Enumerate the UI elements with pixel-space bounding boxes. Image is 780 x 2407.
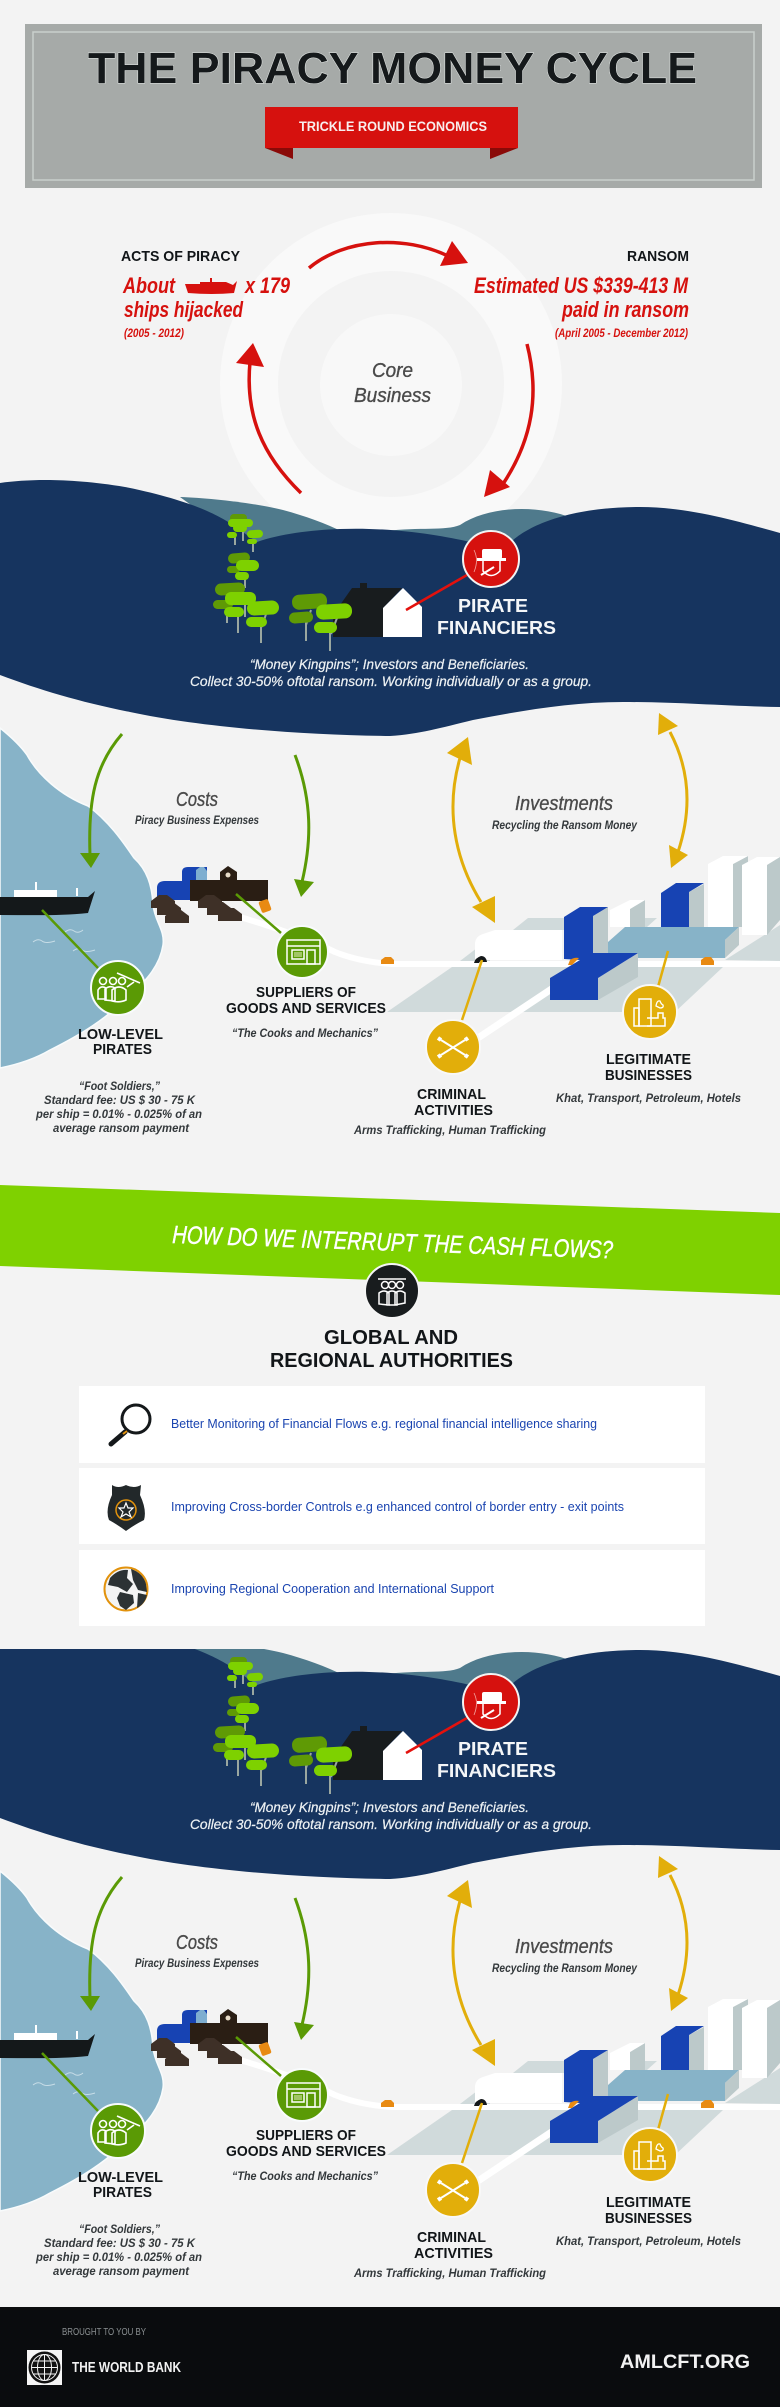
criminal activities text: ACTIVITIES <box>414 1102 493 1119</box>
icon: suppliers <box>276 2069 328 2121</box>
icon: red ship <box>185 278 237 294</box>
criminal activities text: Arms Trafficking, Human Trafficking <box>353 2266 547 2280</box>
investments label <box>492 1936 638 1975</box>
title: THE PIRACY MONEY CYCLE <box>88 44 697 93</box>
icon: legitimate businesses <box>623 2128 677 2182</box>
ransom text: Estimated US $339-413 M <box>474 273 689 298</box>
lake <box>0 728 163 1068</box>
core business cycle circles <box>220 213 562 555</box>
ransom text: RANSOM <box>627 248 689 265</box>
criminal activities text: CRIMINAL <box>417 1086 486 1103</box>
cycle arrows <box>236 241 533 497</box>
criminal activities text: Arms Trafficking, Human Trafficking <box>353 1123 547 1137</box>
icon: low-level pirates <box>91 2104 145 2158</box>
navy hills <box>0 1649 780 1879</box>
footer <box>0 2307 780 2407</box>
ransom text: (April 2005 - December 2012) <box>555 326 688 340</box>
description: “Money Kingpins”; Investors and Beneficiaries. <box>250 1799 529 1815</box>
legitimate businesses text: Khat, Transport, Petroleum, Hotels <box>556 2234 741 2248</box>
heading: pirate financiers <box>437 596 556 638</box>
icon: world bank logo <box>27 2350 62 2385</box>
investments label <box>492 793 638 832</box>
description: Collect 30-50% oftotal ransom. Working individually or as a group. <box>190 673 592 689</box>
costs label: Piracy Business Expenses <box>135 813 259 827</box>
trees <box>213 514 352 651</box>
low-level pirates text <box>35 1026 202 1135</box>
acts of piracy text: About <box>122 273 176 298</box>
description <box>190 656 592 689</box>
suppliers text: “The Cooks and Mechanics” <box>232 2169 378 2183</box>
legitimate businesses text: BUSINESSES <box>605 2210 692 2227</box>
panel: regional cooperation <box>79 1550 705 1626</box>
heading: global and regional authorities: GLOBAL AND <box>324 1327 458 1349</box>
core business cycle circles: Business <box>354 385 431 407</box>
suppliers text: “The Cooks and Mechanics” <box>232 1026 378 1040</box>
low-level pirates text: “Foot Soldiers,” <box>79 1079 160 1093</box>
legitimate businesses text: BUSINESSES <box>605 1067 692 1084</box>
description: “Money Kingpins”; Investors and Beneficiaries. <box>250 656 529 672</box>
icon: legitimate businesses <box>623 985 677 1039</box>
heading: pirate financiers: FINANCIERS <box>437 1761 556 1781</box>
leader lines <box>42 2037 668 2163</box>
ship <box>0 2025 95 2094</box>
low-level pirates text: LOW-LEVEL <box>78 1026 163 1043</box>
icon: magnifier <box>111 1405 150 1444</box>
panel: regional cooperation: Improving Regional Cooperation and International Support <box>171 1582 495 1596</box>
icon: badge <box>108 1485 145 1531</box>
heading: pirate financiers <box>437 1739 556 1781</box>
costs arrows <box>80 734 314 897</box>
ribbon subtitle: TRICKLE ROUND ECONOMICS <box>299 119 487 134</box>
legitimate businesses text: LEGITIMATE <box>606 1051 691 1068</box>
low-level pirates text: PIRATES <box>93 2184 152 2201</box>
heading: pirate financiers: PIRATE <box>458 1739 528 1759</box>
icon: low-level pirates <box>91 961 145 1015</box>
costs label <box>135 1932 259 1970</box>
heading: pirate financiers: PIRATE <box>458 596 528 616</box>
icon: pirate financier <box>463 531 519 587</box>
icon: criminal activities <box>426 2163 480 2217</box>
icon: authorities <box>365 1264 419 1318</box>
investments label: Investments <box>515 1936 613 1958</box>
criminal activities text: ACTIVITIES <box>414 2245 493 2262</box>
acts of piracy text <box>121 248 291 340</box>
legitimate businesses text: Khat, Transport, Petroleum, Hotels <box>556 1091 741 1105</box>
low-level pirates text: Standard fee: US $ 30 - 75 K <box>44 1093 196 1107</box>
trees <box>213 1657 352 1794</box>
footer: THE WORLD BANK <box>72 2360 181 2376</box>
investments label: Investments <box>515 793 613 815</box>
low-level pirates text: average ransom payment <box>53 2264 190 2278</box>
town <box>151 866 272 923</box>
icon: criminal activities <box>426 1020 480 1074</box>
town <box>151 2009 272 2066</box>
green banner: HOW DO WE INTERRUPT THE CASH FLOWS? <box>172 1221 614 1264</box>
house <box>333 575 467 637</box>
panel: monitoring <box>79 1386 705 1463</box>
flows panel (repeat) <box>0 1856 780 2280</box>
house <box>333 1718 467 1780</box>
low-level pirates text: per ship = 0.01% - 0.025% of an <box>35 1107 202 1121</box>
ransom text <box>474 248 689 340</box>
suppliers text: GOODS AND SERVICES <box>226 2143 386 2160</box>
low-level pirates text: “Foot Soldiers,” <box>79 2222 160 2236</box>
investments label: Recycling the Ransom Money <box>492 1961 638 1975</box>
costs label <box>135 789 259 827</box>
suppliers text: SUPPLIERS OF <box>256 984 356 1001</box>
panel: monitoring: Better Monitoring of Financial Flows e.g. regional financial intelligence sharing <box>171 1417 597 1431</box>
heading: pirate financiers: FINANCIERS <box>437 618 556 638</box>
ransom text: paid in ransom <box>561 297 689 322</box>
core business cycle circles: Core <box>372 360 413 382</box>
investments label: Recycling the Ransom Money <box>492 818 638 832</box>
low-level pirates text: Standard fee: US $ 30 - 75 K <box>44 2236 196 2250</box>
footer: BROUGHT TO YOU BY <box>62 2327 146 2338</box>
flows panel <box>0 713 780 1137</box>
city and roads <box>240 856 780 1038</box>
header banner <box>25 24 762 188</box>
legitimate businesses text: LEGITIMATE <box>606 2194 691 2211</box>
low-level pirates text: per ship = 0.01% - 0.025% of an <box>35 2250 202 2264</box>
investment arrows <box>447 713 688 923</box>
low-level pirates text: PIRATES <box>93 1041 152 1058</box>
navy hills <box>0 480 780 736</box>
costs label: Piracy Business Expenses <box>135 1956 259 1970</box>
suppliers text: SUPPLIERS OF <box>256 2127 356 2144</box>
heading: global and regional authorities: REGIONAL AUTHORITIES <box>270 1350 513 1372</box>
pirate financiers panel (repeat) <box>0 1649 780 1879</box>
suppliers text: GOODS AND SERVICES <box>226 1000 386 1017</box>
legitimate businesses text <box>556 2194 741 2248</box>
low-level pirates text: LOW-LEVEL <box>78 2169 163 2186</box>
costs arrows <box>80 1877 314 2040</box>
icon: globe <box>104 1568 148 1610</box>
panel: cross-border controls <box>79 1468 705 1544</box>
criminal activities text <box>353 1086 547 1137</box>
icon: suppliers <box>276 926 328 978</box>
acts of piracy text: ACTS OF PIRACY <box>121 248 240 265</box>
repeated section <box>0 1623 780 2280</box>
acts of piracy text: x 179 <box>244 273 291 298</box>
costs label: Costs <box>176 1932 218 1954</box>
ribbon subtitle <box>265 107 518 159</box>
criminal activities text <box>353 2229 547 2280</box>
legitimate businesses text <box>556 1051 741 1105</box>
low-level pirates text: average ransom payment <box>53 1121 190 1135</box>
panel: cross-border controls: Improving Cross-border Controls e.g enhanced control of border entry - exit points <box>171 1500 624 1514</box>
suppliers text <box>226 2127 386 2183</box>
heading: global and regional authorities <box>270 1327 513 1372</box>
suppliers text <box>226 984 386 1040</box>
description <box>190 1799 592 1832</box>
criminal activities text: CRIMINAL <box>417 2229 486 2246</box>
low-level pirates text <box>35 2169 202 2278</box>
costs label: Costs <box>176 789 218 811</box>
pirate financiers panel <box>0 480 780 736</box>
green banner <box>0 1185 780 1295</box>
investment arrows <box>447 1856 688 2066</box>
acts of piracy text: ships hijacked <box>124 297 243 322</box>
lake <box>0 1871 163 2211</box>
description: Collect 30-50% oftotal ransom. Working individually or as a group. <box>190 1816 592 1832</box>
city and roads <box>240 1999 780 2181</box>
icon: pirate financier <box>463 1674 519 1730</box>
acts of piracy text: (2005 - 2012) <box>124 326 184 340</box>
ship <box>0 882 95 952</box>
leader lines <box>42 894 668 1020</box>
footer: AMLCFT.ORG <box>620 2352 750 2373</box>
